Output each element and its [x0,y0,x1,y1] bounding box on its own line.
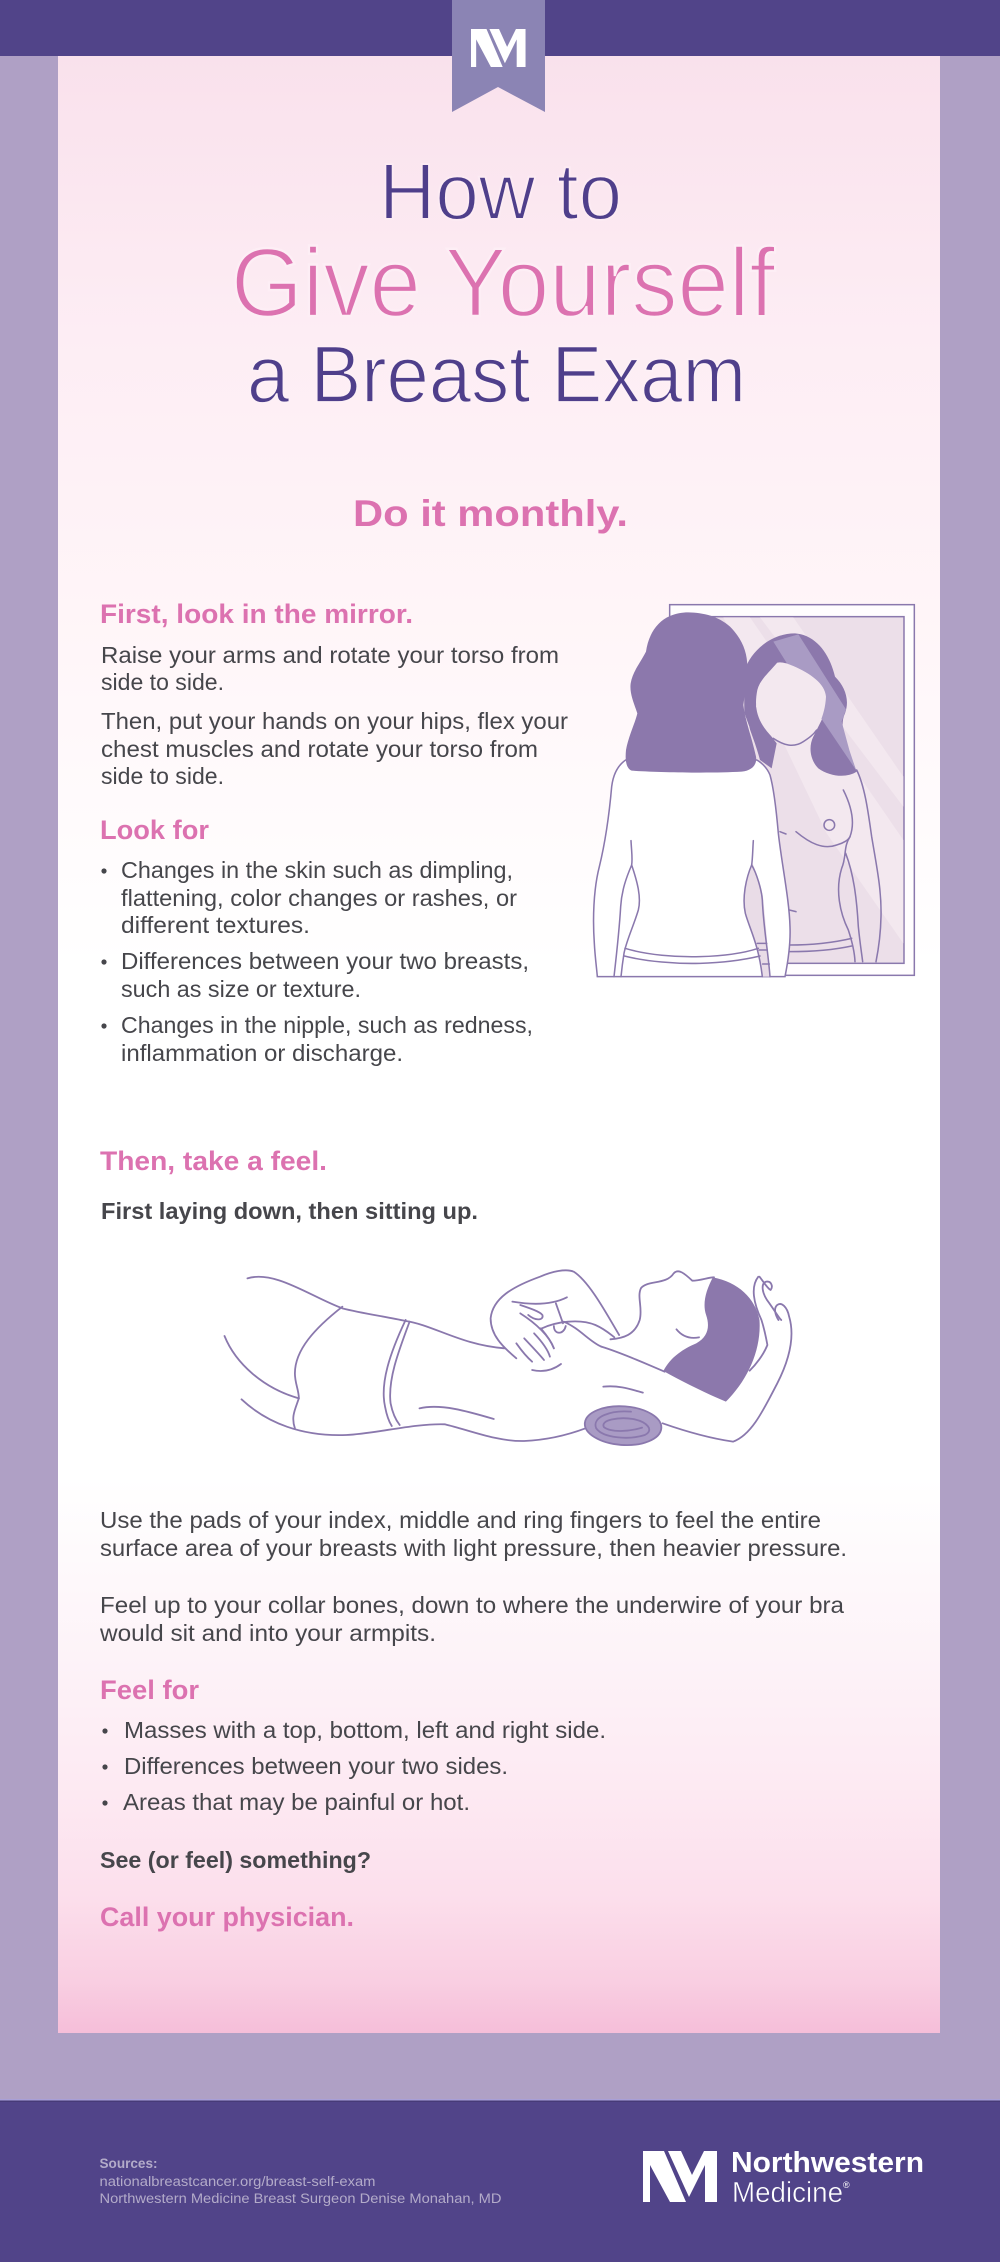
sources: Sources: [100,2156,158,2171]
callout: call your physician: Call your physician. [100,1902,354,1932]
logo wordmark [731,2147,924,2209]
heading: feel for: Feel for [100,1675,199,1705]
hair [663,1277,760,1402]
list: look for items: inflammation or discharge. [121,1040,403,1066]
section: then, take a feel [100,1146,478,1224]
section: first, look in the mirror [100,599,568,1066]
heading: take a feel: Then, take a feel. [100,1146,327,1176]
title [231,147,776,420]
reflection: body lines [780,770,881,962]
mirror light streaks [723,617,903,943]
list: look for items: such as size or texture. [121,976,361,1002]
title: How to [379,147,622,236]
heading: look for: Look for [100,815,209,845]
text block: area: Feel up to your collar bones, down to where the underwire of your bra [100,1592,844,1618]
mirror glass [700,617,904,963]
list: look for items: Changes in the nipple, such as redness, [121,1012,533,1038]
note: position: First laying down, then sitting up. [101,1198,478,1224]
title: Give Yourself [231,228,776,337]
reflection: face [756,662,826,745]
reflection: hair [744,633,857,776]
list: feel for items: Differences between your two sides. [124,1753,508,1779]
text block: mirror instructions: side to side. [101,763,224,789]
reflection: teardrop gap [738,708,750,752]
head and neck [610,1271,714,1339]
reflection: chin line [773,730,817,745]
heading: first look: First, look in the mirror. [100,599,413,629]
sources: Northwestern Medicine Breast Surgeon Denise Monahan, MD [100,2191,502,2206]
text block: mirror instructions: chest muscles and rotate your torso from [101,736,538,762]
body outline [225,1277,791,1442]
logo wordmark: Northwestern [731,2147,924,2179]
text block: pressure: Use the pads of your index, middle and ring fingers to feel the entire [100,1507,821,1533]
text block: mirror instructions: Then, put your hands on your hips, flex your [101,708,568,734]
section: feel instructions [99,1507,847,1932]
list: feel for items: Masses with a top, bottom, left and right side. [124,1717,606,1743]
text block: mirror instructions: Raise your arms and rotate your torso from [101,642,559,668]
raised hand [750,1277,781,1371]
reflection: light over hair [773,634,856,770]
list: feel for items [102,1717,606,1815]
icon: NM monogram [643,2151,717,2202]
footer bar [0,2099,1000,2262]
top banner bar [0,0,1000,56]
sources: nationalbreastcancer.org/breast-self-exam [100,2174,376,2189]
list: look for items: Differences between your two breasts, [121,948,529,974]
mirror frame [670,605,914,975]
pillow [583,1404,663,1448]
figure: gap between arm and torso [744,863,770,977]
text block: mirror instructions [101,642,568,789]
figure: back of woman [594,760,790,977]
list: look for items: Changes in the skin such as dimpling, [121,857,513,883]
panel: pink content card [58,56,940,2033]
list: look for items: different textures. [121,912,310,938]
list: look for items [101,857,533,1066]
ribbon with logo [452,0,545,112]
title: a Breast Exam [247,330,746,420]
logo wordmark: Medicine [732,2177,843,2209]
text block: area line 2: would sit and into your armpits. [99,1620,436,1646]
list: look for items: flattening, color changes or rashes, or [121,885,517,911]
illustration: woman lying down [225,1270,791,1448]
sources [100,2156,502,2206]
logo wordmark: ® [843,2180,850,2190]
figure: back and arm lines [614,841,770,977]
text block: mirror instructions: side to side. [101,669,224,695]
subheading: do it monthly: Do it monthly. [353,493,628,534]
text block: pressure line 2: surface area of your breasts with light pressure, then heavier pressure. [100,1535,847,1561]
list: feel for items: Areas that may be painful or hot. [123,1789,470,1815]
Northwestern Medicine logo [643,2147,924,2209]
callout: see something: See (or feel) something? [100,1847,371,1873]
figure: back hair [626,612,756,773]
illustration: woman in mirror [594,605,914,977]
arm and hand [491,1270,619,1362]
icon: NM monogram [471,29,526,67]
